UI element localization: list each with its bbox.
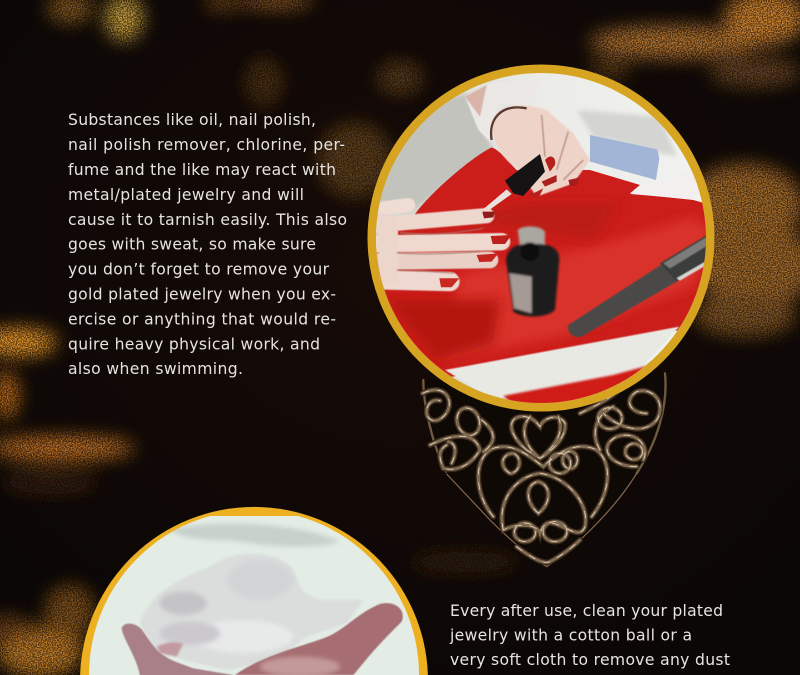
photo circle: manicure scene [360,60,720,420]
body text: sweat and chemicals warning: nail polish remover, chlorine, per- [68,136,345,154]
black pen [568,233,710,337]
body text: cleaning after use [449,602,730,669]
body text: sweat and chemicals warning: also when swimming. [68,360,243,378]
photo: hand cradling cotton [89,516,419,675]
body text: cleaning after use: Every after use, clean your plated [450,602,723,620]
palm and fingers [122,624,233,675]
body text: cleaning after use: jewelry with a cotton ball or a [449,626,692,644]
body text: sweat and chemicals warning: you don’t forget to remove your [68,260,330,278]
body text: sweat and chemicals warning: goes with sweat, so make sure [68,236,316,254]
photo circle: cotton ball in hand [80,507,428,675]
blue buffer block [590,135,659,180]
body text: sweat and chemicals warning: cause it to tarnish easily. This also [68,211,347,229]
brush and black cap [505,154,545,196]
red towel [377,147,717,377]
upper hand holding brush [465,84,494,141]
white file in foreground [445,327,679,396]
photo: hands painting nails on red towel [376,73,706,403]
lower hand resting on towel [377,205,502,283]
red nails on lower hand [482,212,495,218]
cotton [140,554,363,670]
body text: sweat and chemicals warning [68,111,347,378]
blurred polish bottle [506,226,559,316]
body text: sweat and chemicals warning: metal/plated jewelry and will [68,186,304,204]
body text: sweat and chemicals warning: gold plated jewelry when you ex- [68,286,336,304]
gold ring [80,507,428,675]
body text: sweat and chemicals warning: Substances like oil, nail polish, [68,111,316,129]
red nails on upper hand [545,156,555,172]
body text: cleaning after use: very soft cloth to remove any dust [450,651,730,669]
white paper [631,168,700,199]
body text: sweat and chemicals warning: fume and the like may react with [68,161,336,179]
heart filigree pendant [423,373,666,567]
body text: sweat and chemicals warning: quire heavy physical work, and [68,336,320,354]
gold ring [372,69,710,407]
body text: sweat and chemicals warning: ercise or anything that would re- [68,310,336,328]
